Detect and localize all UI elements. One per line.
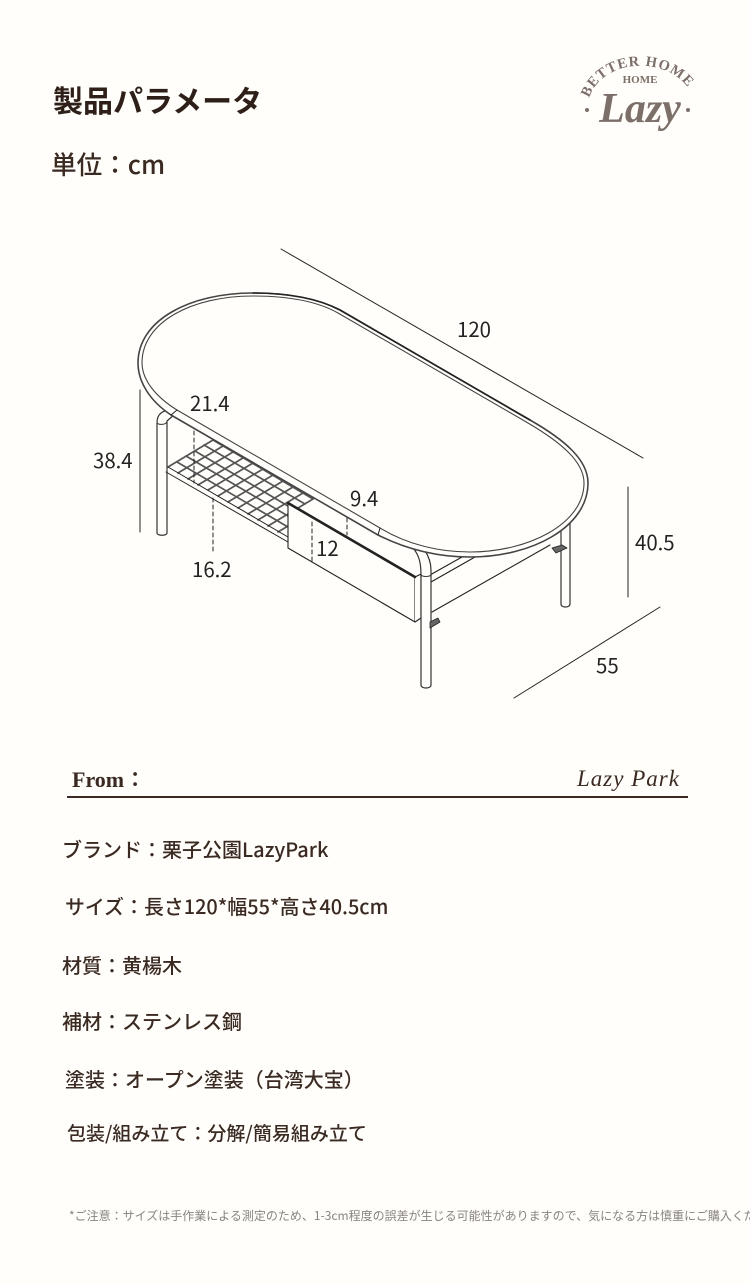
- size row: サイズ：長さ120*幅55*高さ40.5cm: [65, 891, 388, 920]
- logo: Better Home Lazy: BETTER HOME: [580, 56, 694, 98]
- under-table height dimension line: [139, 390, 141, 532]
- product spec list: [62, 834, 388, 1146]
- dimension labels: 16.2: [192, 553, 232, 583]
- drawer: [288, 503, 421, 622]
- brand signature: Lazy Park: [577, 766, 680, 791]
- from heading: From：: [72, 767, 146, 792]
- material row: 材質：黄楊木: [62, 950, 182, 979]
- logo: Better Home Lazy: HOME: [623, 74, 657, 86]
- sub-material row: 補材：ステンレス鋼: [62, 1006, 242, 1035]
- dimension labels: 38.4: [93, 444, 133, 474]
- length dimension line: [281, 249, 643, 458]
- finish row: 塗装：オープン塗装（台湾大宝）: [65, 1064, 364, 1093]
- dimension labels: 40.5: [635, 526, 675, 556]
- left back leg: [157, 408, 175, 535]
- brand row: ブランド：栗子公園LazyPark: [62, 834, 328, 863]
- logo: Better Home Lazy: Lazy: [598, 86, 681, 132]
- title: 製品パラメータ: [53, 77, 262, 121]
- lower frame rails: [430, 545, 550, 612]
- bottom shelf mesh: [168, 440, 313, 532]
- width dimension line: [514, 607, 660, 698]
- unit label: 単位：cm: [51, 145, 165, 182]
- foot brackets: [430, 545, 567, 628]
- shelf front edge: [166, 467, 288, 542]
- dimension labels: 21.4: [190, 387, 230, 417]
- table top: [138, 293, 588, 557]
- dimension labels: 55: [596, 649, 619, 679]
- dimension labels: 120: [457, 313, 491, 343]
- dimension labels: 12: [316, 532, 339, 562]
- front leg: [413, 548, 431, 688]
- dimension labels: 9.4: [350, 482, 378, 512]
- packaging row: 包装/組み立て：分解/簡易組み立て: [67, 1119, 367, 1146]
- divider under from: [67, 796, 688, 798]
- total height dimension line: [627, 487, 629, 597]
- dimension labels: [93, 313, 675, 679]
- right back leg: [561, 522, 570, 607]
- dashed measure guides: [194, 431, 347, 561]
- logo: Better Home Lazy: [580, 56, 694, 132]
- technical drawing of oval table: [93, 248, 675, 698]
